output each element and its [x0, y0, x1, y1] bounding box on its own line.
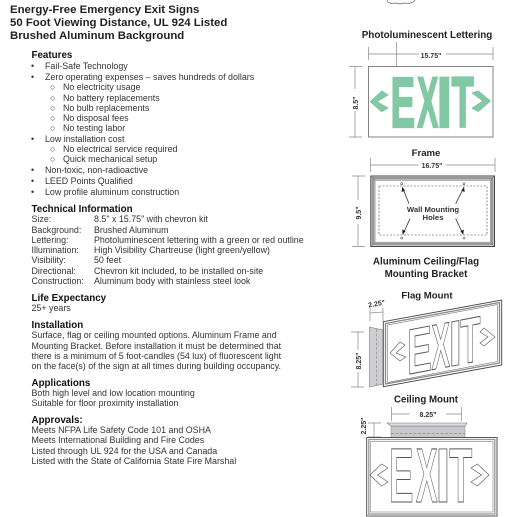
diagram: photoluminescent lettering: Photoluminescent Lettering: [362, 30, 492, 41]
approvals section: Meets NFPA Life Safety Code 101 and OSHA: [32, 425, 211, 435]
diagram: photoluminescent lettering: 15.75": [421, 53, 441, 60]
title: [10, 4, 227, 42]
technical information section: Visibility:: [32, 255, 66, 265]
features section: ○: [50, 154, 55, 164]
title: Brushed Aluminum Background: [10, 30, 184, 42]
diagram: frame: 9.5": [356, 206, 363, 220]
technical information section: 50 feet: [94, 255, 122, 265]
features section: •: [31, 187, 34, 197]
approvals section: Listed through UL 924 for the USA and Canada: [32, 446, 217, 456]
features section: No electrical service required: [63, 144, 177, 154]
diagram: ceiling mount: X: [416, 434, 438, 517]
applications section: Applications: [32, 378, 91, 389]
diagram: ceiling mount: 8.25": [420, 412, 436, 419]
features section: LEED Points Qualified: [45, 176, 133, 186]
technical information section: Aluminum body with stainless steel look: [94, 276, 251, 286]
features section: No testing labor: [63, 123, 125, 133]
features section: No bulb replacements: [63, 103, 150, 113]
technical information section: Technical Information: [32, 204, 133, 215]
features section: ○: [50, 144, 55, 154]
diagram: frame: Wall Mounting: [407, 205, 459, 214]
technical information section: [32, 204, 304, 286]
technical information section: Photoluminescent lettering with a green or red outline: [94, 235, 304, 245]
diagram: flag mount: I: [448, 307, 462, 381]
features section: No disposal fees: [63, 113, 129, 123]
features section: Fail-Safe Technology: [45, 61, 128, 71]
features section: [31, 50, 255, 197]
features section: ○: [50, 103, 55, 113]
features section: •: [31, 61, 34, 71]
diagram: frame: [352, 148, 495, 246]
approvals section: Meets International Building and Fire Codes: [32, 435, 205, 445]
technical information section: High Visibility Chartreuse (light green/yellow): [94, 245, 270, 255]
technical information section: Brushed Aluminum: [94, 225, 168, 235]
diagram: flag mount: E: [407, 312, 432, 389]
features section: Low installation cost: [45, 134, 125, 144]
installation section: there is a minimum of 5 foot-candles (54 lux) of fluorescent light: [32, 351, 282, 361]
life expectancy section: Life Expectancy: [32, 293, 107, 304]
features section: ○: [50, 93, 55, 103]
diagram: flag mount: [351, 290, 502, 389]
approvals section: [32, 415, 236, 466]
heading: aluminum ceiling/flag mounting bracket: [373, 256, 479, 280]
installation section: [32, 320, 282, 371]
diagram: photoluminescent lettering: [349, 30, 493, 144]
technical information section: Background:: [32, 225, 81, 235]
technical information section: Illumination:: [32, 245, 79, 255]
installation section: Surface, flag or ceiling mounted options. Aluminum Frame and: [32, 330, 277, 340]
diagram: photoluminescent lettering: E: [391, 64, 415, 144]
diagram: photoluminescent lettering: 8.5": [353, 96, 360, 110]
features section: Features: [32, 50, 73, 61]
life expectancy section: 25+ years: [32, 303, 71, 313]
features section: Low profile aluminum construction: [45, 187, 179, 197]
features section: ○: [50, 113, 55, 123]
installation section: on the face(s) of the sign at all times during building occupancy.: [32, 361, 281, 371]
diagram: photoluminescent lettering: X: [417, 62, 438, 143]
diagram: ceiling mount: [361, 394, 497, 517]
heading: aluminum ceiling/flag mounting bracket: Aluminum Ceiling/Flag: [373, 256, 479, 268]
technical information section: Construction:: [32, 276, 84, 286]
technical information section: Directional:: [32, 266, 76, 276]
heading: aluminum ceiling/flag mounting bracket: Mounting Bracket: [385, 269, 468, 280]
features section: ○: [50, 82, 55, 92]
features section: Quick mechanical setup: [63, 154, 157, 164]
installation section: Installation: [32, 320, 83, 331]
diagram: frame: Holes: [423, 213, 443, 222]
features section: •: [31, 176, 34, 186]
features section: Zero operating expenses – saves hundreds of dollars: [45, 72, 255, 82]
technical information section: 8.5" x 15.75" with chevron kit: [94, 214, 208, 224]
approvals section: Listed with the State of California State Fire Marshal: [32, 456, 236, 466]
features section: ○: [50, 123, 55, 133]
features section: No electricity usage: [63, 82, 141, 92]
diagram: ceiling mount: Ceiling Mount: [394, 394, 459, 406]
applications section: [32, 378, 195, 408]
features section: •: [31, 165, 34, 175]
diagram: ceiling mount: E: [389, 433, 413, 517]
title: Energy-Free Emergency Exit Signs: [10, 4, 199, 16]
diagram: flag mount: X: [432, 308, 450, 384]
icon: cropped top fixture: [387, 0, 415, 4]
diagram: flag mount: Flag Mount: [401, 290, 453, 302]
diagram: ceiling mount: T: [449, 432, 472, 517]
features section: •: [31, 134, 34, 144]
diagram: flag mount: 2.25": [368, 300, 386, 309]
diagram: frame: Frame: [412, 148, 440, 159]
installation section: Mounting Bracket. Before installation it must be determined that: [32, 341, 282, 351]
diagram: photoluminescent lettering: I: [437, 62, 452, 143]
technical information section: Chevron kit included, to be installed on-site: [94, 266, 263, 276]
features section: No battery replacements: [63, 93, 160, 103]
diagram: photoluminescent lettering: T: [452, 64, 474, 144]
diagram: flag mount: 8.25": [356, 353, 363, 369]
diagram: flag mount: T: [460, 303, 481, 378]
technical information section: Size:: [32, 214, 51, 224]
life expectancy section: [32, 293, 107, 313]
features section: •: [31, 72, 34, 82]
features section: Non-toxic, non-radioactive: [45, 165, 148, 175]
diagram: frame: 16.75": [422, 163, 442, 170]
diagram: ceiling mount: I: [435, 433, 451, 517]
approvals section: Approvals:: [32, 415, 83, 426]
diagram: ceiling mount: 2.25": [361, 418, 368, 434]
applications section: Both high level and low location mounting: [32, 388, 195, 398]
applications section: Suitable for floor proximity installation: [32, 398, 179, 408]
technical information section: Lettering:: [32, 235, 69, 245]
title: 50 Foot Viewing Distance, UL 924 Listed: [10, 17, 227, 29]
